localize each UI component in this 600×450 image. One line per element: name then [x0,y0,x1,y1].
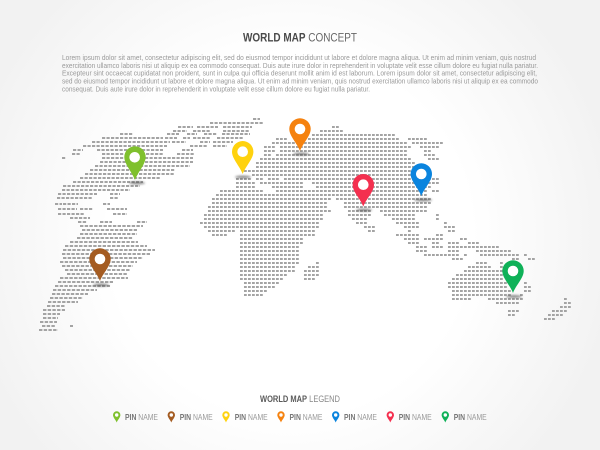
intro text block: Excepteur sint occaecat cupidatat non proident, sunt in culpa qui officia deserunt mollit anim id est laborum. Lorem ipsum dolor sit amet, consectetur adipiscing elit, [62,69,537,78]
intro text block: exercitation ullamco laboris nisi ut aliquip ex ea commodo consequat. Duis aute irure dolor in reprehenderit in voluptate velit esse cillum dolore eu fugiat nulla pariatur. [62,61,538,70]
legend title: WORLD MAP LEGEND [260,394,340,404]
pin: yellow [232,141,253,178]
legend item: orange pin: PIN NAME [290,412,323,422]
intro text block: consequat. Duis aute irure dolor in reprehenderit in voluptate velit esse cillum dolore eu fugiat nulla pariatur. [62,85,370,94]
intro text block: sed do eiusmod tempor incididunt ut labore et dolore magna aliqua. Ut enim ad minim veniam, quis nostrud exercitation ullamco laboris nisi ut aliquip ex ea commodo [62,77,538,86]
legend item: brown pin [168,411,213,422]
intro text block [62,53,538,94]
dotted world map [39,119,571,330]
legend item: dark green pin: PIN NAME [454,412,487,422]
pin: red [353,174,374,212]
pin: green [124,146,146,184]
legend item: brown pin: PIN NAME [180,412,213,422]
title: WORLD MAP CONCEPT [243,30,358,44]
map: North America and Greenland [55,119,263,218]
legend item: orange pin [277,411,323,422]
legend item: blue pin: PIN NAME [344,412,377,422]
pin: brown [89,248,111,286]
legend item: green pin: PIN NAME [125,412,158,422]
legend item: red pin [387,411,432,422]
pin: dark green [502,260,524,298]
legend [113,411,487,422]
legend item: blue pin [332,411,377,422]
pin: orange [289,118,311,156]
legend item: dark green pin [442,411,487,422]
legend item: yellow pin [222,411,268,422]
map: Europe, Africa and Asia [200,127,535,295]
pin: blue [411,163,432,202]
legend item: yellow pin: PIN NAME [235,412,268,422]
intro text block: Lorem ipsum dolor sit amet, consectetur adipiscing elit, sed do eiusmod tempor incididunt ut labore et dolore magna aliqua. Ut enim ad minim veniam, quis nostrud [62,53,536,62]
map: South America [39,222,155,330]
legend item: green pin [113,411,158,422]
map: Australia and New Zealand [448,263,571,319]
legend item: red pin: PIN NAME [399,412,432,422]
